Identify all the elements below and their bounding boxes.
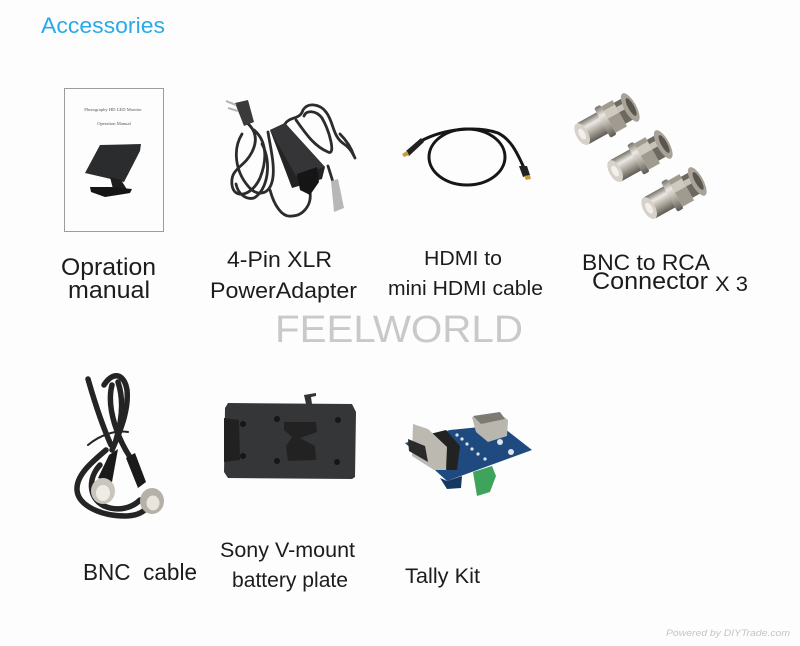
- item: V-mount battery plate: [224, 393, 356, 479]
- label: 4-Pin XLR PowerAdapter: 4-Pin XLR: [227, 247, 332, 272]
- label: Tally Kit: Tally Kit: [405, 565, 480, 588]
- label: Sony V-mount battery plate: [220, 539, 355, 592]
- label: HDMI to mini HDMI cable: mini HDMI cable: [388, 278, 543, 300]
- item: operation manual booklet: Operation Manual: [97, 121, 131, 126]
- label: Opration manual: Opration: [61, 254, 156, 281]
- item: tally kit board: [405, 412, 532, 496]
- watermark: FEELWORLD: [275, 309, 523, 351]
- label: BNC to RCA Connector X 3: [582, 250, 748, 296]
- label: Opration manual: [61, 254, 156, 304]
- label: BNC to RCA Connector X 3: Connector: [592, 268, 708, 295]
- label: BNC to RCA Connector X 3: BNC to RCA: [582, 250, 710, 275]
- label: 4-Pin XLR PowerAdapter: PowerAdapter: [210, 278, 357, 303]
- item: BNC to RCA connectors: [569, 90, 711, 226]
- label: Sony V-mount battery plate: battery plate: [232, 569, 348, 592]
- item: operation manual booklet: [64, 88, 164, 232]
- label: BNC to RCA Connector X 3: X 3: [715, 273, 748, 296]
- label: HDMI to mini HDMI cable: [388, 248, 543, 300]
- label: 4-Pin XLR PowerAdapter: [210, 247, 357, 303]
- item: BNC cable: [77, 376, 164, 516]
- label: HDMI to mini HDMI cable: HDMI to: [424, 248, 502, 270]
- item: operation manual booklet: Photography HD LED Monitor: [84, 107, 142, 112]
- label: Opration manual: manual: [68, 277, 150, 304]
- label: BNC cable: BNC cable: [83, 559, 197, 585]
- footer credit: Powered by DIYTrade.com: [666, 628, 790, 639]
- item: power adapter: [226, 100, 355, 216]
- item: HDMI cable: [402, 129, 531, 185]
- label: Sony V-mount battery plate: Sony V-mount: [220, 539, 355, 562]
- title: Accessories: [41, 13, 165, 38]
